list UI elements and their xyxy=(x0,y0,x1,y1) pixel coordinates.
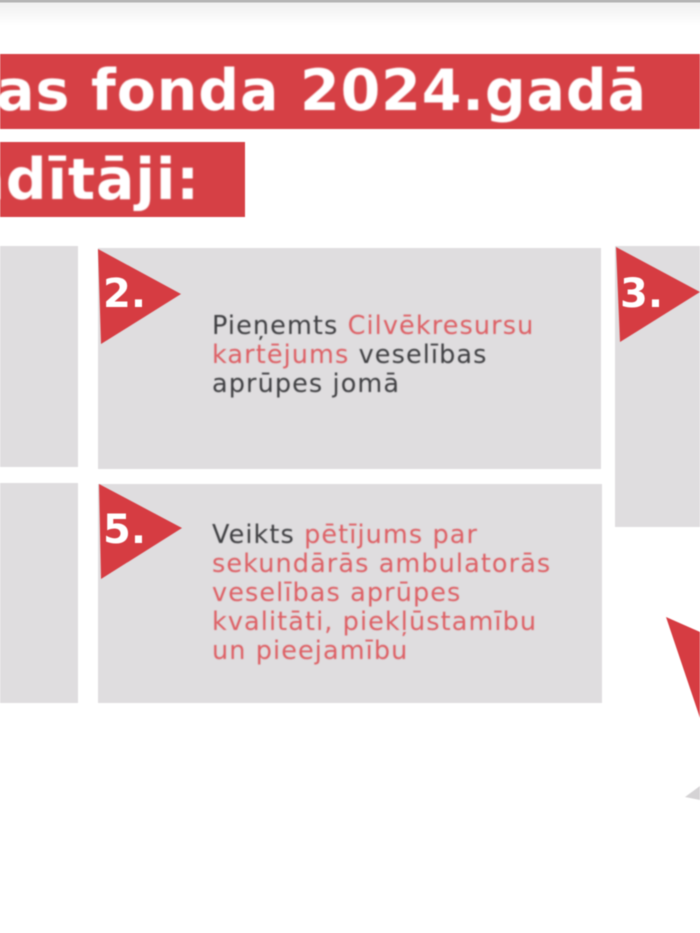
panel: 4 (cropped) xyxy=(0,483,78,703)
text: panel 2 xyxy=(212,311,534,399)
text: panel 5: un pieejamību xyxy=(212,636,408,666)
panel: 1 (cropped) xyxy=(0,246,78,467)
heading line 1: as fonda 2024.gadā xyxy=(0,58,647,124)
panel: 5 xyxy=(98,484,602,703)
text: panel 5: sekundārās ambulatorās xyxy=(212,549,551,579)
text: panel 5: kvalitāti, piekļūstamību xyxy=(212,607,537,637)
top shadow strip xyxy=(0,0,700,26)
number 3: 3. xyxy=(620,271,663,317)
text: panel 5: veselības aprūpes xyxy=(212,578,461,608)
text: panel 5 xyxy=(212,520,551,666)
panel: 3 (cropped) xyxy=(615,246,700,527)
text: panel 5: Veikts pētījums par xyxy=(212,520,478,550)
number 5: 5. xyxy=(103,507,146,553)
number 2: 2. xyxy=(103,271,146,317)
panel: 2 xyxy=(98,248,601,469)
text: panel 2: kartējums veselības xyxy=(212,340,488,370)
text: panel 2: Pieņemts Cilvēkresursu xyxy=(212,311,534,341)
text: panel 2: aprūpes jomā xyxy=(212,369,400,399)
